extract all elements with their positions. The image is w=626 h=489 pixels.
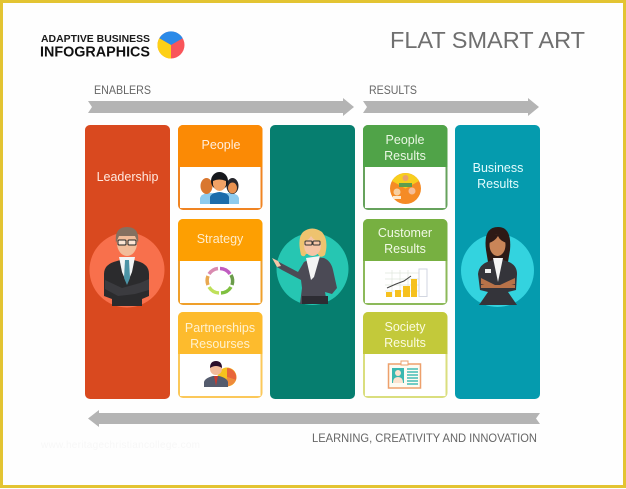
panel: society results (363, 312, 448, 398)
title: FLAT SMART ART (390, 27, 585, 53)
panel: people results: People (386, 133, 425, 147)
panel: customer results: Customer (378, 226, 432, 240)
icon: businesswoman with crossed arms (478, 227, 517, 305)
logo: ADAPTIVE BUSINESS (41, 33, 150, 45)
panel: people results: Results (384, 149, 426, 163)
panel: customer results: Results (384, 242, 426, 256)
icon: man with pie chart (204, 361, 236, 387)
icon: people group (200, 172, 239, 204)
panel: leadership: Leadership (97, 170, 158, 184)
logo: INFOGRAPHICS (40, 44, 150, 60)
panel: society results: Results (384, 336, 426, 350)
panel: people results (363, 125, 448, 210)
arrow: learning (88, 410, 540, 427)
panel: strategy (178, 219, 262, 305)
watermark: www.heritagechristiancollege.com (40, 440, 200, 451)
icon: businesswoman (272, 228, 337, 304)
panel: leadership (85, 125, 170, 399)
icon: logo pie (157, 31, 184, 59)
label: learning: LEARNING, CREATIVITY AND INNOVATION (312, 431, 537, 445)
icon: bar chart (385, 269, 427, 297)
panel: business results: Business (473, 161, 523, 175)
arrow: enablers (88, 98, 354, 116)
panel: business results (455, 125, 540, 399)
panel: people: People (202, 138, 241, 152)
panel: partnerships: Resourses (190, 337, 250, 351)
icon: id card (388, 361, 420, 388)
panel: strategy: Strategy (197, 232, 244, 246)
panel: center teal (270, 125, 355, 399)
icon: businessman (104, 227, 149, 306)
panel: business results: Results (477, 177, 519, 191)
panel: partnerships: Partnerships (185, 321, 255, 335)
panel: people (178, 125, 262, 210)
panel: society results: Society (384, 320, 426, 334)
panel: partnerships (178, 312, 262, 398)
label: enablers: ENABLERS (94, 83, 151, 97)
logo (40, 31, 184, 60)
icon: people results badge (390, 173, 421, 204)
panel: customer results (363, 219, 448, 305)
arrow: results (363, 98, 539, 116)
icon: strategy ring (207, 268, 233, 293)
label: results: RESULTS (369, 83, 417, 97)
